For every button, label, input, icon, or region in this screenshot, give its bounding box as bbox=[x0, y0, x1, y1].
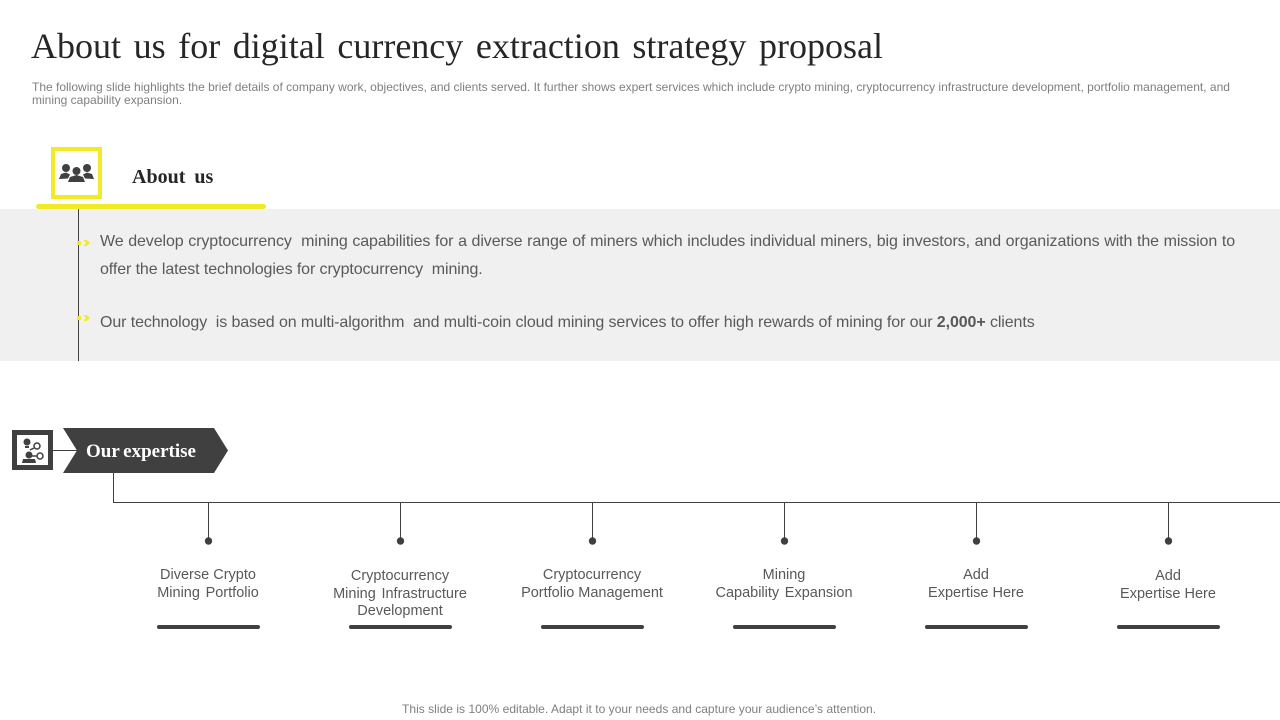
timeline lines bbox=[113, 473, 1280, 545]
expertise item 2: Development bbox=[357, 603, 443, 619]
subtitle text bbox=[32, 80, 1230, 107]
expertise item 2 bbox=[333, 568, 467, 619]
panel: about us background bbox=[0, 209, 1280, 361]
about us heading: About us bbox=[132, 166, 213, 188]
expertise item 5: Expertise Here bbox=[928, 585, 1024, 601]
expertise item 2: Cryptocurrency bbox=[351, 568, 449, 584]
expertise item 3 bbox=[521, 567, 663, 601]
item underline 2 bbox=[349, 625, 452, 629]
bullet text 1: We develop cryptocurrency mining capabilities for a diverse range of miners which includes individual miners, big investors, and organizations with the mission to offer the latest technologies for cryptocurrency mining. bbox=[100, 233, 1235, 278]
expertise item 4: Mining bbox=[763, 567, 805, 583]
banner: our expertise bbox=[63, 428, 228, 473]
item underline 6 bbox=[1117, 625, 1220, 629]
expertise item 1: Mining Portfolio bbox=[157, 585, 259, 601]
yellow underline bbox=[36, 204, 266, 209]
item underline 4 bbox=[733, 625, 836, 629]
expertise item 5: Add bbox=[963, 567, 989, 583]
bullet text 2: Our technology is based on multi-algorithm and multi-coin cloud mining services to offer high rewards of mining for our 2,000+ clients bbox=[100, 314, 1035, 331]
expertise item 4: Capability Expansion bbox=[715, 585, 853, 601]
expertise item 6: Add bbox=[1155, 568, 1181, 584]
expertise item 3: Cryptocurrency bbox=[543, 567, 641, 583]
expertise item 6 bbox=[1120, 568, 1216, 602]
item underline 5 bbox=[925, 625, 1028, 629]
expertise item 2: Mining Infrastructure bbox=[333, 586, 467, 602]
item underline 1 bbox=[157, 625, 260, 629]
expertise item 6: Expertise Here bbox=[1120, 586, 1216, 602]
item underline 3 bbox=[541, 625, 644, 629]
icon: bullet 1 bbox=[77, 240, 90, 246]
icon: people in yellow frame bbox=[51, 147, 102, 199]
expertise item 1: Diverse Crypto bbox=[160, 567, 256, 583]
expertise item 5 bbox=[928, 567, 1024, 601]
icon: bullet 2 bbox=[77, 315, 90, 321]
icon: expertise bbox=[12, 430, 53, 470]
subtitle text: mining capability expansion. bbox=[32, 93, 182, 107]
expertise item 3: Portfolio Management bbox=[521, 585, 663, 601]
expertise item 1 bbox=[157, 567, 259, 601]
footer note: This slide is 100% editable. Adapt it to your needs and capture your audience’s attention. bbox=[402, 702, 876, 716]
banner label: Our expertise bbox=[86, 441, 196, 462]
about us vertical line bbox=[78, 209, 79, 361]
expertise item 4 bbox=[715, 567, 853, 601]
title: About us for digital currency extraction strategy proposal bbox=[31, 26, 883, 66]
connector line bbox=[53, 450, 77, 451]
subtitle text: The following slide highlights the brief details of company work, objectives, and clients served. It further shows expert services which include crypto mining, cryptocurrency infrastructure development, portfolio management, and bbox=[32, 80, 1230, 94]
